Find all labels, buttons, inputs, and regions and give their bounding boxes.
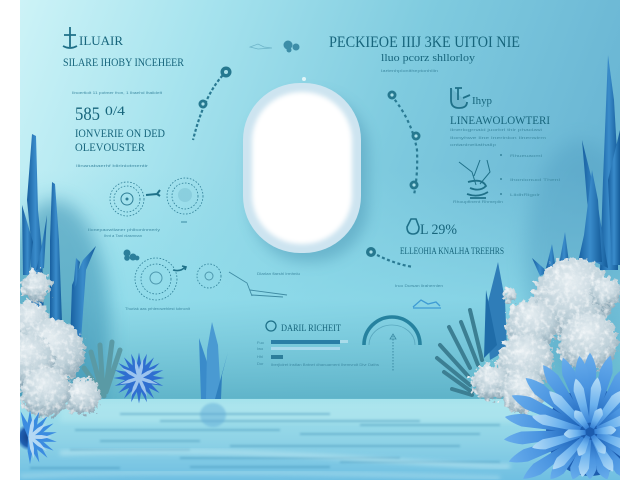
urchin: large bottom right <box>503 353 640 480</box>
icon: ring <box>266 321 276 331</box>
icon: anchor glyph <box>63 27 77 48</box>
connector: right dotted arc <box>388 90 420 195</box>
bottom bar chart panel: Iberjlolret lnstlan Bntnet dhanuarnent Ihemvndt Dlvr Daths <box>271 362 379 367</box>
icon: small bubbles top centre <box>284 40 300 52</box>
left diagram: circle to circle: Ilonepaowtlaner phlbonlnmerly <box>88 227 160 232</box>
bottom bar chart panel: Iwo <box>257 346 264 351</box>
swoosh pointer <box>229 272 287 297</box>
statistic: 585%: 0/4 <box>105 103 126 118</box>
top-left heading block <box>63 27 184 95</box>
icon: small wave top-left <box>250 44 272 49</box>
bullet list: Ihonionuol Thenl <box>510 177 560 182</box>
small caption and wave chart <box>395 283 443 308</box>
bottom bar chart panel: Hhl <box>257 354 263 359</box>
top-right heading block: PECKIEOE IIIJ 3KE UITOI NIE <box>329 34 520 51</box>
water surface <box>20 399 620 480</box>
kelp: left tall <box>22 134 96 345</box>
icon: cluster <box>124 250 139 261</box>
top-right heading block: Iartenhplonitheptonhllin <box>381 68 438 73</box>
statistic: 585%: Ilinanabaerhf bliriniotmentir <box>76 163 149 168</box>
right info panel: ontanlneliathallp <box>450 142 497 147</box>
connector: left dotted arc <box>193 66 232 140</box>
seaweed: left fern <box>84 342 120 396</box>
left diagram: lower circles: Thurlak aas prhlerowehlest lubncnlt <box>125 306 191 311</box>
connector: short dotted arrow <box>366 247 413 267</box>
statistic: 585% <box>75 103 165 168</box>
bullet list: Rhueuaoml <box>510 153 542 158</box>
bottom bar chart panel: DARIL RICHEIT <box>281 323 341 333</box>
statistic: 89%: ELLEOHIA KNALHA TREEHRS <box>400 247 504 257</box>
coral: right white <box>472 258 621 414</box>
top-left heading block: SILARE IHOBY INCEHEER <box>63 55 184 69</box>
right info panel: Rhoupfinent Rhmeplin <box>453 199 503 204</box>
left diagram: lower circles <box>124 250 300 311</box>
icon: plant in bowl <box>459 160 490 185</box>
top-right heading block: lluo pcorz shllorloy <box>381 53 476 64</box>
urchin: bottom left <box>16 410 57 464</box>
statistic: 585%: IONVERIE ON DED <box>75 126 165 140</box>
bottom bar chart panel: Fuo <box>257 340 265 345</box>
icon: flask <box>451 88 470 108</box>
coral: left white <box>2 271 101 417</box>
right info panel: Ihyp <box>472 96 492 107</box>
left diagram: lower circles: Dlarlan flarshl lrmhnlu <box>257 271 300 276</box>
statistic: 89%: L 29% <box>420 222 457 238</box>
bottom bar chart panel: Dor <box>257 361 264 366</box>
left diagram: circle to circle: Ihnt a Tanl nlasmnan <box>104 233 142 238</box>
bullet list: LiidhRigolr <box>510 192 541 197</box>
right info panel: Ilonyhwe Ilne Inerinlon Ilnenstrm <box>450 135 547 140</box>
top-left heading block: ILUAIR <box>79 33 123 48</box>
gauge arch <box>364 317 420 372</box>
small caption and wave chart: Iruo Dursan lirahernlen <box>395 283 443 288</box>
left diagram: circle to circle <box>88 178 203 238</box>
statistic: 89% <box>400 219 504 257</box>
kelp: centre <box>199 322 228 399</box>
central capsule frame <box>243 77 368 262</box>
seaweed: right mid kelp and fern <box>437 262 507 395</box>
right info panel: Ilnerlogrnaid juorbrl thlr phaclast <box>450 127 543 132</box>
bullet list <box>500 153 560 197</box>
statistic: 585%: OLEVOUSTER <box>75 140 145 154</box>
kelp: right tall <box>532 55 620 276</box>
bottom bar chart panel <box>257 321 379 367</box>
right info panel <box>450 88 560 204</box>
top-right heading block <box>329 34 520 73</box>
right info panel: LINEAWOLOWTERI <box>450 113 550 127</box>
statistic: 585%: 585 <box>75 104 100 125</box>
arrow <box>146 190 160 196</box>
urchin: centre left <box>114 352 164 404</box>
top-left heading block: Ilnoertiolt 11 potmer fron, 1 Ibaehd lhaiidelt <box>72 90 163 95</box>
